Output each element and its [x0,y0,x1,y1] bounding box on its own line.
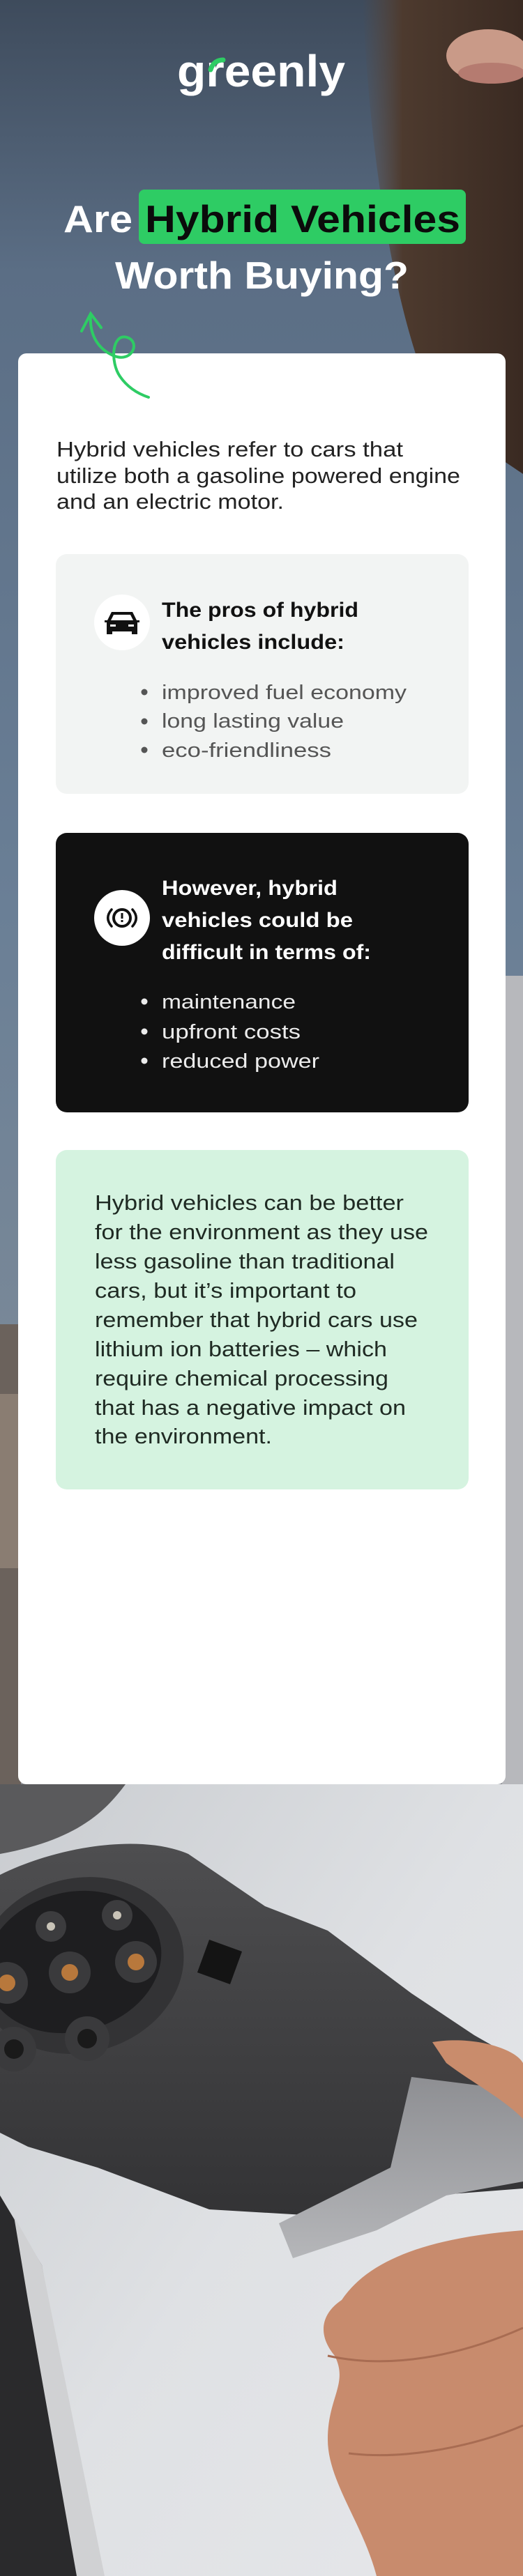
list: cons: reduced power [162,1050,319,1073]
panel: environmental note: require chemical processing [95,1366,388,1390]
panel: environmental note: lithium ion batteries – which [95,1337,387,1361]
list: cons [141,991,319,1073]
title: Are [63,197,132,240]
logo: greenly: greenly [177,46,345,96]
heading: pros [162,599,358,654]
list: cons: maintenance [162,991,296,1013]
panel: environmental note [56,1150,469,1489]
background: bottom photo with charger plug [0,1784,523,2576]
arrow: green curly arrow [82,314,149,397]
panel: environmental note: the environment. [95,1424,272,1448]
panel: environmental note: cars, but it’s important to [95,1278,356,1303]
heading: pros: vehicles include: [162,631,344,654]
heading: cons: vehicles could be [162,909,353,932]
icon: warning [94,890,150,946]
heading: pros: The pros of hybrid [162,599,358,622]
intro text: Hybrid vehicles refer to cars that [56,437,403,461]
plug head [0,1854,204,2077]
list: pros [141,682,407,762]
intro text [56,437,460,514]
plug grey handle [279,2077,523,2258]
title: Worth Buying? [115,254,409,297]
title: Hybrid Vehicles [145,197,460,240]
panel: environmental note: that has a negative impact on [95,1395,406,1420]
panel: environmental note: remember that hybrid cars use [95,1308,418,1332]
list: pros: improved fuel economy [162,682,407,704]
hand [432,2040,523,2119]
list: pros: eco-friendliness [162,739,331,762]
background: top photo [0,0,523,1812]
main white card [18,353,506,1784]
panel: cons [56,833,469,1112]
heading: cons: difficult in terms of: [162,941,371,964]
icon: car [94,595,150,650]
panel: environmental note: Hybrid vehicles can be better [95,1190,404,1215]
heading: cons: However, hybrid [162,877,338,900]
title [63,190,466,297]
panel: environmental note: less gasoline than traditional [95,1249,395,1273]
panel: environmental note: for the environment as they use [95,1220,428,1244]
list: cons: upfront costs [162,1021,301,1043]
panel: pros [56,554,469,794]
plug body [0,1844,523,2216]
heading: cons [162,877,371,964]
list: pros: long lasting value [162,710,344,733]
intro text: and an electric motor. [56,489,284,514]
intro text: utilize both a gasoline powered engine [56,463,460,488]
